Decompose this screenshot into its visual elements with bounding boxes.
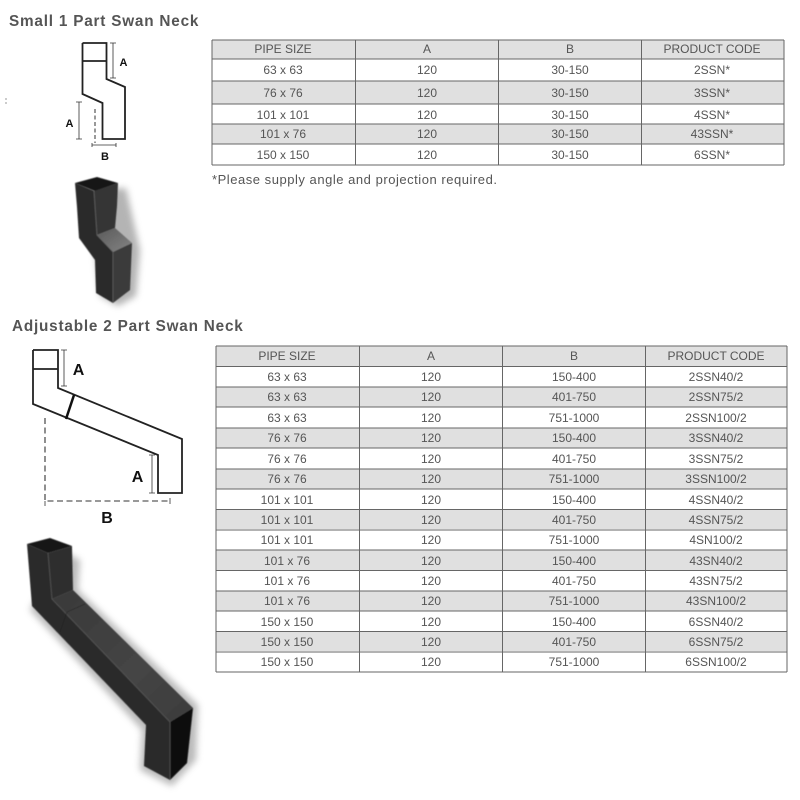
table: adjustable swan neck sizes: 401-750 [552, 513, 596, 527]
table: adjustable swan neck sizes: 2SSN100/2 [685, 411, 747, 425]
table: adjustable swan neck sizes: 120 [421, 411, 441, 425]
table: adjustable swan neck sizes: 120 [421, 554, 441, 568]
table: adjustable swan neck sizes: 4SSN40/2 [689, 493, 744, 507]
table: adjustable swan neck sizes: 401-750 [552, 452, 596, 466]
table: adjustable swan neck sizes: 150 x 150 [261, 655, 314, 669]
table: adjustable swan neck sizes: 751-1000 [549, 411, 600, 425]
table: adjustable swan neck sizes: 101 x 76 [264, 554, 310, 568]
diagram: small swan neck dimensions [66, 43, 128, 163]
diagram: adjustable swan neck dimensions: A [73, 362, 85, 379]
heading: adjustable 2 part swan neck: Adjustable 2 Part Swan Neck [12, 318, 244, 335]
table: small swan neck sizes: 120 [417, 127, 437, 141]
table: adjustable swan neck sizes: A [427, 349, 435, 363]
table: small swan neck sizes: 150 x 150 [257, 148, 310, 162]
table: adjustable swan neck sizes: 120 [421, 655, 441, 669]
table: adjustable swan neck sizes: 751-1000 [549, 594, 600, 608]
table: adjustable swan neck sizes: 43SN75/2 [689, 574, 743, 588]
table: adjustable swan neck sizes: 120 [421, 513, 441, 527]
table: adjustable swan neck sizes: 120 [421, 594, 441, 608]
table: small swan neck sizes: 120 [417, 63, 437, 77]
table: small swan neck sizes: 30-150 [551, 108, 589, 122]
table: small swan neck sizes: 2SSN* [694, 63, 730, 77]
table: small swan neck sizes: 101 x 76 [260, 127, 306, 141]
table: adjustable swan neck sizes: 150-400 [552, 493, 596, 507]
table: adjustable swan neck sizes: 120 [421, 493, 441, 507]
table: adjustable swan neck sizes: PRODUCT CODE [667, 349, 765, 363]
table: adjustable swan neck sizes: 101 x 101 [261, 493, 314, 507]
table: adjustable swan neck sizes: 120 [421, 390, 441, 404]
diagram: small swan neck dimensions: B [101, 151, 109, 163]
table: adjustable swan neck sizes: 76 x 76 [267, 472, 307, 486]
table: adjustable swan neck sizes: 150-400 [552, 615, 596, 629]
table: small swan neck sizes: 120 [417, 148, 437, 162]
table: small swan neck sizes: 120 [417, 108, 437, 122]
table: adjustable swan neck sizes: 2SSN75/2 [689, 390, 744, 404]
table: adjustable swan neck sizes: 150 x 150 [261, 615, 314, 629]
table: adjustable swan neck sizes: 751-1000 [549, 533, 600, 547]
table: adjustable swan neck sizes: 120 [421, 452, 441, 466]
page mark [5, 98, 7, 106]
diagram: adjustable swan neck dimensions: B [101, 510, 113, 527]
table: small swan neck sizes [212, 40, 784, 165]
footnote: *Please supply angle and projection required. [212, 172, 497, 187]
table: adjustable swan neck sizes: 43SN100/2 [686, 594, 746, 608]
table: adjustable swan neck sizes: 6SSN75/2 [689, 635, 744, 649]
photo: small swan neck [75, 177, 140, 306]
table: adjustable swan neck sizes: 3SSN100/2 [685, 472, 747, 486]
table: adjustable swan neck sizes: 101 x 101 [261, 533, 314, 547]
table: small swan neck sizes: PIPE SIZE [254, 42, 312, 56]
table: adjustable swan neck sizes: 43SN40/2 [689, 554, 743, 568]
table: adjustable swan neck sizes: 76 x 76 [267, 431, 307, 445]
table: adjustable swan neck sizes: 120 [421, 431, 441, 445]
table: adjustable swan neck sizes [216, 346, 787, 672]
table: adjustable swan neck sizes: 76 x 76 [267, 452, 307, 466]
table: adjustable swan neck sizes: 101 x 76 [264, 574, 310, 588]
table: adjustable swan neck sizes: B [570, 349, 578, 363]
table: adjustable swan neck sizes: 120 [421, 635, 441, 649]
table: small swan neck sizes: 43SSN* [691, 127, 734, 141]
photo: adjustable swan neck [27, 538, 198, 786]
table: adjustable swan neck sizes: 120 [421, 370, 441, 384]
table: adjustable swan neck sizes: 6SSN40/2 [689, 615, 744, 629]
diagram: small swan neck dimensions: A [120, 57, 128, 69]
table: adjustable swan neck sizes: 150-400 [552, 431, 596, 445]
diagram: adjustable swan neck dimensions: A [132, 469, 144, 486]
table: adjustable swan neck sizes: 4SSN75/2 [689, 513, 744, 527]
table: adjustable swan neck sizes: 3SSN75/2 [689, 452, 744, 466]
table: small swan neck sizes: 120 [417, 86, 437, 100]
table: small swan neck sizes: 6SSN* [694, 148, 730, 162]
table: small swan neck sizes: 3SSN* [694, 86, 730, 100]
table: adjustable swan neck sizes: 63 x 63 [267, 370, 307, 384]
table: adjustable swan neck sizes: 120 [421, 472, 441, 486]
table: adjustable swan neck sizes: 401-750 [552, 390, 596, 404]
table: adjustable swan neck sizes: 2SSN40/2 [689, 370, 744, 384]
table: adjustable swan neck sizes: 120 [421, 615, 441, 629]
table: adjustable swan neck sizes: 150 x 150 [261, 635, 314, 649]
table: adjustable swan neck sizes: 101 x 101 [261, 513, 314, 527]
table: adjustable swan neck sizes: 4SN100/2 [689, 533, 743, 547]
table: adjustable swan neck sizes: 3SSN40/2 [689, 431, 744, 445]
table: small swan neck sizes: PRODUCT CODE [663, 42, 761, 56]
table: small swan neck sizes: 30-150 [551, 86, 589, 100]
table: adjustable swan neck sizes: 401-750 [552, 574, 596, 588]
table: adjustable swan neck sizes: 63 x 63 [267, 411, 307, 425]
table: small swan neck sizes: 30-150 [551, 148, 589, 162]
table: adjustable swan neck sizes: 120 [421, 533, 441, 547]
table: small swan neck sizes: 4SSN* [694, 108, 730, 122]
table: small swan neck sizes: 101 x 101 [257, 108, 310, 122]
table: small swan neck sizes: 76 x 76 [263, 86, 303, 100]
table: small swan neck sizes: 30-150 [551, 127, 589, 141]
table: adjustable swan neck sizes: 150-400 [552, 554, 596, 568]
diagram: adjustable swan neck dimensions [33, 350, 182, 527]
table: adjustable swan neck sizes: 101 x 76 [264, 594, 310, 608]
table: adjustable swan neck sizes: 401-750 [552, 635, 596, 649]
heading: small 1 part swan neck: Small 1 Part Swan Neck [9, 13, 199, 30]
table: adjustable swan neck sizes: 751-1000 [549, 655, 600, 669]
table: adjustable swan neck sizes: 751-1000 [549, 472, 600, 486]
table: adjustable swan neck sizes: 63 x 63 [267, 390, 307, 404]
table: adjustable swan neck sizes: 120 [421, 574, 441, 588]
table: adjustable swan neck sizes: 150-400 [552, 370, 596, 384]
table: adjustable swan neck sizes: 6SSN100/2 [685, 655, 747, 669]
diagram: small swan neck dimensions: A [66, 118, 74, 130]
table: small swan neck sizes: 63 x 63 [263, 63, 303, 77]
table: small swan neck sizes: B [566, 42, 574, 56]
table: adjustable swan neck sizes: PIPE SIZE [258, 349, 316, 363]
table: small swan neck sizes: 30-150 [551, 63, 589, 77]
table: small swan neck sizes: A [423, 42, 431, 56]
